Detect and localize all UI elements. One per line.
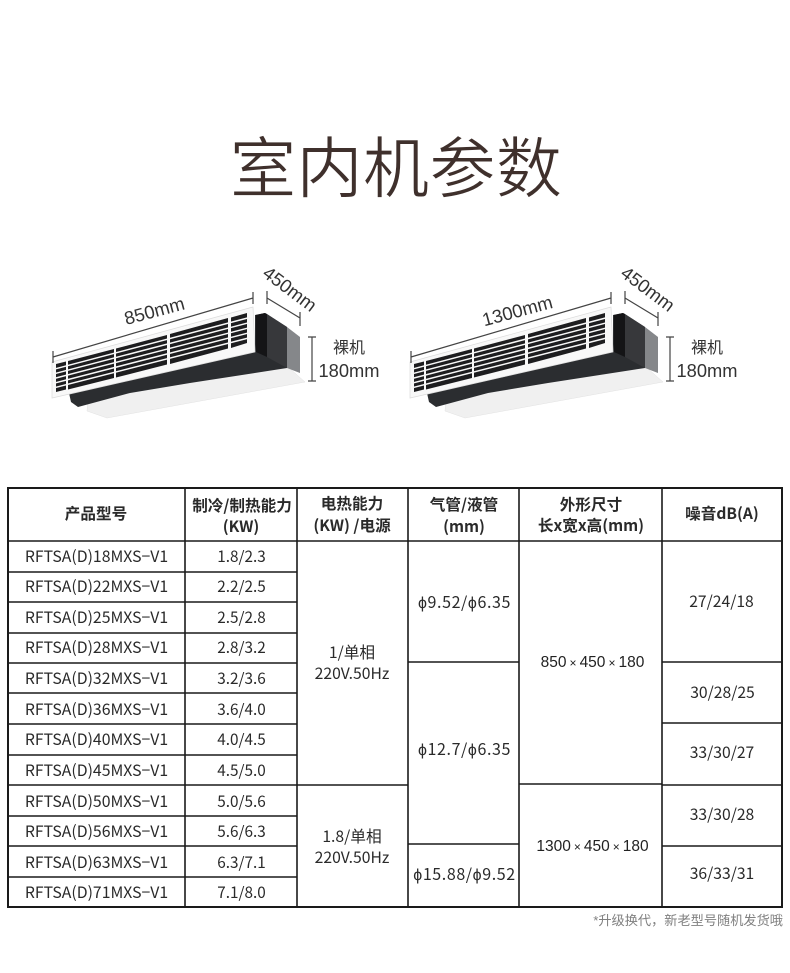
column: dimensions: 1300×450×180 [536, 838, 649, 855]
lower white plate [87, 366, 305, 418]
column: cooling and heating capacity: 2.5/2.8 [217, 606, 266, 628]
dimension line: depth [267, 291, 300, 326]
column: model: RFTSA(D)63MXS−V1 [25, 850, 168, 873]
table header: 制冷/制热能力 [192, 494, 292, 516]
grille white bars [54, 318, 249, 388]
column: cooling and heating capacity: 3.6/4.0 [217, 698, 266, 720]
dimension label: 180mm: 180mm [319, 360, 379, 381]
column: noise: 36/33/31 [690, 861, 754, 884]
dark body [427, 313, 645, 407]
column: cooling and heating capacity: 2.8/3.2 [217, 636, 266, 658]
grille slats [56, 313, 247, 392]
column: electric heating: 220V.50Hz [315, 845, 389, 868]
column: noise [689, 589, 755, 884]
table header: 产品型号 [65, 502, 127, 524]
column: dimensions [536, 654, 649, 855]
white grille panel [52, 307, 255, 398]
column: pipe diameter [413, 589, 516, 885]
column: electric heating: 220V.50Hz [315, 661, 389, 684]
column: model: RFTSA(D)22MXS−V1 [25, 574, 168, 597]
column: electric heating: 1.8/单相 [322, 824, 382, 847]
table header: 外形尺寸 [560, 493, 622, 515]
table header [65, 492, 759, 537]
column: dimensions: 850×450×180 [541, 654, 645, 671]
lower white plate [445, 366, 663, 418]
body corner strip [614, 313, 625, 357]
title: 室内机参数 [230, 116, 562, 212]
column: cooling and heating capacity [217, 545, 266, 903]
column: noise: 27/24/18 [689, 589, 754, 612]
white grille panel [410, 307, 613, 398]
product diagram: 850mm unit [52, 262, 379, 418]
column: model: RFTSA(D)45MXS−V1 [25, 758, 168, 781]
column: electric heating [315, 640, 389, 868]
column: cooling and heating capacity: 5.0/5.6 [217, 790, 266, 812]
column: cooling and heating capacity: 2.2/2.5 [217, 575, 266, 597]
column: model: RFTSA(D)71MXS−V1 [25, 880, 168, 903]
dimension label: 1300mm: 1300mm [480, 291, 555, 330]
table header: (mm) [443, 515, 485, 537]
side cap [287, 327, 300, 373]
body side face [625, 314, 645, 368]
parameter table [8, 488, 782, 907]
column: cooling and heating capacity: 6.3/7.1 [217, 851, 266, 873]
column: electric heating: 1/单相 [329, 640, 375, 663]
dimension line: height [666, 337, 674, 381]
column: model: RFTSA(D)50MXS−V1 [25, 789, 168, 812]
column: cooling and heating capacity: 4.5/5.0 [217, 759, 266, 781]
dimension line: width [53, 292, 253, 363]
column: model [25, 544, 168, 903]
column: noise: 33/30/27 [690, 740, 754, 763]
dimension line: height [308, 337, 316, 381]
dimension label: 180mm: 180mm [677, 360, 737, 381]
table header: 电热能力 [321, 492, 383, 514]
dimension label: bare unit: 裸机 [333, 339, 365, 357]
column: cooling and heating capacity: 4.0/4.5 [217, 728, 266, 750]
table header: 噪音dB(A) [685, 502, 759, 524]
dimension label: 850mm: 850mm [122, 293, 187, 329]
column: cooling and heating capacity: 5.6/6.3 [217, 820, 266, 842]
column: noise: 30/28/25 [690, 680, 755, 703]
body side face [267, 314, 287, 368]
body corner strip [256, 313, 267, 357]
column: model: RFTSA(D)36MXS−V1 [25, 697, 168, 720]
table grid [8, 488, 782, 907]
column: model: RFTSA(D)18MXS−V1 [25, 544, 168, 567]
column: model: RFTSA(D)56MXS−V1 [25, 819, 168, 842]
column: model: RFTSA(D)25MXS−V1 [25, 605, 168, 628]
column: pipe diameter: ϕ15.88/ϕ9.52 [413, 861, 516, 885]
table header: 气管/液管 [430, 493, 498, 515]
table header: (KW) [223, 515, 259, 537]
dimension label: 450mm: 450mm [259, 262, 321, 316]
column: cooling and heating capacity: 3.2/3.6 [217, 667, 266, 689]
side cap [645, 327, 658, 373]
column: model: RFTSA(D)28MXS−V1 [25, 635, 168, 658]
grille white bars [412, 318, 607, 388]
table header: 长x宽x高(mm) [538, 514, 644, 536]
grille slats [414, 313, 605, 392]
footnote: *升级换代，新老型号随机发货哦 [593, 912, 783, 928]
column: model: RFTSA(D)40MXS−V1 [25, 727, 168, 750]
column: noise: 33/30/28 [690, 802, 754, 825]
column: pipe diameter: ϕ12.7/ϕ6.35 [418, 736, 511, 760]
dimension label: 450mm: 450mm [617, 262, 679, 316]
column: pipe diameter: ϕ9.52/ϕ6.35 [418, 589, 511, 613]
dimension line: width [411, 292, 611, 363]
product diagram: 1300mm unit [410, 262, 737, 418]
dark body [69, 313, 287, 407]
column: cooling and heating capacity: 7.1/8.0 [217, 881, 266, 903]
dimension line: depth [625, 291, 658, 326]
column: cooling and heating capacity: 1.8/2.3 [217, 545, 266, 567]
table header: (KW) /电源 [313, 514, 391, 536]
dimension label: bare unit: 裸机 [691, 339, 723, 357]
column: model: RFTSA(D)32MXS−V1 [25, 666, 168, 689]
